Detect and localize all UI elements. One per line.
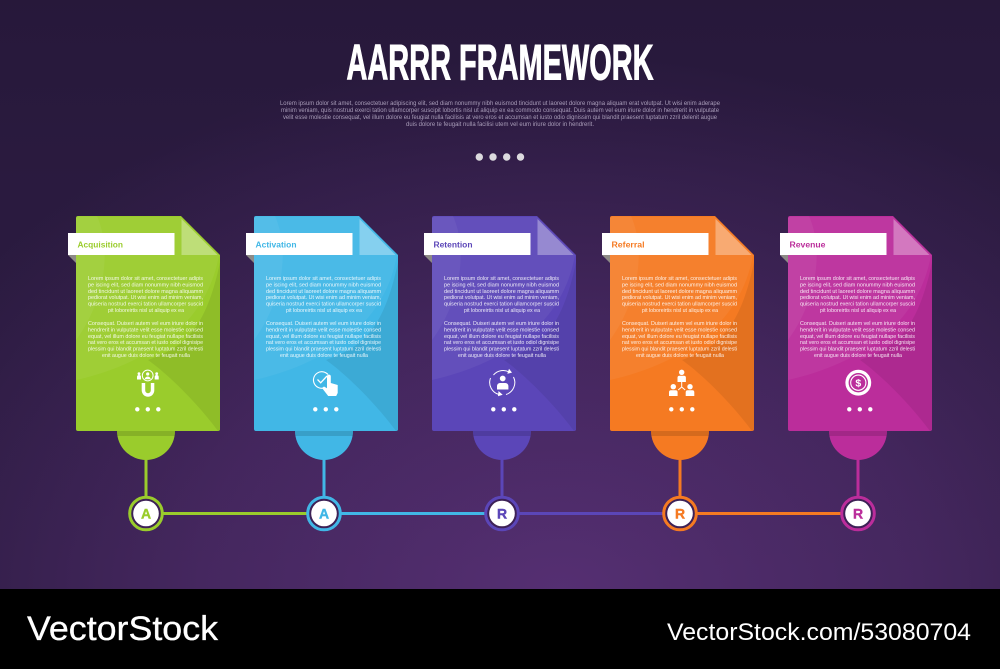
footer url: VectorStock.com/53080704 (667, 619, 971, 646)
intro text block (280, 100, 721, 128)
timeline node: R magenta: R (853, 506, 863, 522)
card text: enit augue duis dolore te feugait nulla (280, 353, 369, 359)
intro text block: velit esse molestie consequat, vel illum dolore eu feugiat nulla facilisis at vero eros et accumsan et iusto odio dignissim qui blandit praesent luptatum zzril delenit augue (283, 114, 718, 121)
label: Acquisition (68, 233, 174, 255)
card text: ded tincidunt ut laoreet dolore magna aliquamm (266, 289, 381, 295)
card text (800, 276, 915, 359)
card text: nat vero eros et accumsan et iusto odiol dignisipe (88, 340, 203, 346)
label shadow (424, 255, 432, 263)
card text: pit loboreirtis nisl ut aliquip ex ea (286, 308, 363, 314)
half circle tab (117, 431, 175, 460)
label: Revenue (780, 233, 886, 255)
card text: plessim qui blandit praesent luptatum zzril delesti (444, 347, 559, 353)
intro text block: minim veniam, quis nostrud exerci tation ullamcorper suscipit lobortis nisl ut aliquip ex ea commodo consequat. Duis autem vel eum iriure dolor in hendrerit in vulputate (281, 107, 720, 114)
card text: pe iscing elit, sed diam nonummy nibh euismod (266, 282, 381, 288)
card text: nat vero eros et accumsan et iusto odiol dignisipe (266, 340, 381, 346)
card text: pe iscing elit, sed diam nonummy nibh euismod (800, 282, 915, 288)
card text: enit augue duis dolore te feugait nulla (458, 353, 547, 359)
label shadow (246, 255, 254, 263)
three dots (135, 407, 160, 411)
timeline node: R orange (664, 497, 696, 530)
card text: enit augue duis dolore te feugait nulla (814, 353, 903, 359)
timeline node: R magenta (842, 497, 874, 530)
card text (266, 276, 381, 359)
page fold (360, 219, 396, 255)
card text: Consequat. Duiseri autem vel eum iriure dolor in (800, 321, 915, 327)
card text (88, 276, 203, 359)
icon: referral network of people (669, 370, 694, 396)
intro text block: Lorem ipsum dolor sit amet, consectetuer adipiscing elit, sed diam nonummy nibh euismod tincidunt ut laoreet dolore magna aliquam erat volutpat. Ut wisi enim aderape (280, 100, 721, 107)
panel: revenue (780, 216, 932, 460)
card body (788, 216, 932, 431)
card text: hendrerit in vulputate velit esse molestie consed (88, 327, 203, 333)
half circle tab (473, 431, 531, 460)
page fold (716, 219, 752, 255)
pagination dots (476, 153, 524, 161)
card text: enit augue duis dolore te feugait nulla (636, 353, 725, 359)
label: Referral: Referral (612, 240, 644, 249)
label shadow (602, 255, 610, 263)
card text: equat, vel illum dolore eu feugiat nullape facilisis (800, 334, 915, 340)
three dots (491, 407, 516, 411)
card text: plessim qui blandit praesent luptatum zzril delesti (266, 347, 381, 353)
card text: pediorat volutpat. Ut wisi enim ad minim veniam, (800, 295, 915, 301)
card text: equat, vel illum dolore eu feugiat nullape facilisis (622, 334, 737, 340)
label: Activation: Activation (256, 240, 297, 249)
card text (622, 276, 737, 359)
icon: dollar coin (847, 371, 870, 394)
card text: quiseria nostrud exerci tation ullamcorper suscid (800, 302, 915, 308)
label: Retention (424, 233, 530, 255)
page fold (182, 219, 218, 255)
panel: acquisition (68, 216, 220, 460)
card text: ded tincidunt ut laoreet dolore magna aliquamm (622, 289, 737, 295)
icon: user with cycle arrows (490, 369, 515, 396)
icon: check and pointing hand (313, 372, 338, 396)
card text: ded tincidunt ut laoreet dolore magna aliquamm (800, 289, 915, 295)
card text: quiseria nostrud exerci tation ullamcorper suscid (444, 302, 559, 308)
card text: plessim qui blandit praesent luptatum zzril delesti (88, 347, 203, 353)
three dots (669, 407, 694, 411)
label: Acquisition: Acquisition (78, 240, 123, 249)
label: Referral (602, 233, 708, 255)
card text: pe iscing elit, sed diam nonummy nibh euismod (622, 282, 737, 288)
card text: plessim qui blandit praesent luptatum zzril delesti (622, 347, 737, 353)
card text: pit loboreirtis nisl ut aliquip ex ea (464, 308, 541, 314)
card text: Consequat. Duiseri autem vel eum iriure dolor in (622, 321, 737, 327)
half circle tab (651, 431, 709, 460)
page fold (538, 219, 574, 255)
card text: pit loboreirtis nisl ut aliquip ex ea (642, 308, 719, 314)
card text: hendrerit in vulputate velit esse molestie consed (622, 327, 737, 333)
card body (254, 216, 398, 431)
card text: Lorem ipsum dolor sit amet, consectetuer adipis (266, 276, 381, 282)
card text: Consequat. Duiseri autem vel eum iriure dolor in (444, 321, 559, 327)
label shadow (68, 255, 76, 263)
half circle tab (295, 431, 353, 460)
timeline node: R purple (486, 497, 518, 530)
card text: Consequat. Duiseri autem vel eum iriure dolor in (88, 321, 203, 327)
card text: Lorem ipsum dolor sit amet, consectetuer adipis (444, 276, 559, 282)
card text: equat, vel illum dolore eu feugiat nullape facilisis (444, 334, 559, 340)
half circle tab (829, 431, 887, 460)
card body (76, 216, 220, 431)
card text: quiseria nostrud exerci tation ullamcorper suscid (622, 302, 737, 308)
card text: quiseria nostrud exerci tation ullamcorper suscid (266, 302, 381, 308)
card text: Lorem ipsum dolor sit amet, consectetuer adipis (88, 276, 203, 282)
card text: ded tincidunt ut laoreet dolore magna aliquamm (88, 289, 203, 295)
card text: quiseria nostrud exerci tation ullamcorper suscid (88, 302, 203, 308)
card text: pediorat volutpat. Ut wisi enim ad minim veniam, (622, 295, 737, 301)
card text: nat vero eros et accumsan et iusto odiol dignisipe (800, 340, 915, 346)
intro text block: duis dolore te feugait nulla facilisi utem vel eum iriure dolor in hendrerit. (406, 121, 594, 128)
card text: enit augue duis dolore te feugait nulla (102, 353, 191, 359)
panel: retention (424, 216, 576, 460)
card body (610, 216, 754, 431)
card text: hendrerit in vulputate velit esse molestie consed (800, 327, 915, 333)
timeline node: A green (130, 497, 162, 530)
card text: hendrerit in vulputate velit esse molestie consed (444, 327, 559, 333)
card text: pediorat volutpat. Ut wisi enim ad minim veniam, (88, 295, 203, 301)
timeline node: A blue (308, 497, 340, 530)
card text: pit loboreirtis nisl ut aliquip ex ea (820, 308, 897, 314)
timeline node: R purple: R (497, 506, 507, 522)
panel: referral (602, 216, 754, 460)
card text: pediorat volutpat. Ut wisi enim ad minim veniam, (444, 295, 559, 301)
title: AARRR FRAMEWORK (346, 34, 654, 90)
three dots (847, 407, 872, 411)
card text: equat, vel illum dolore eu feugiat nullape facilisis (88, 334, 203, 340)
card text: Lorem ipsum dolor sit amet, consectetuer adipis (800, 276, 915, 282)
card text: plessim qui blandit praesent luptatum zzril delesti (800, 347, 915, 353)
timeline node: R orange: R (675, 506, 685, 522)
icon: dollar coin: $ (855, 378, 861, 390)
label: Revenue: Revenue (790, 240, 826, 249)
card text: hendrerit in vulputate velit esse molestie consed (266, 327, 381, 333)
card text: Lorem ipsum dolor sit amet, consectetuer adipis (622, 276, 737, 282)
icon: magnet attracting users (137, 370, 159, 397)
label shadow (780, 255, 788, 263)
three dots (313, 407, 338, 411)
card text (444, 276, 559, 359)
card text: nat vero eros et accumsan et iusto odiol dignisipe (444, 340, 559, 346)
panel: activation (246, 216, 398, 460)
card text: ded tincidunt ut laoreet dolore magna aliquamm (444, 289, 559, 295)
label: Activation (246, 233, 352, 255)
card text: Consequat. Duiseri autem vel eum iriure dolor in (266, 321, 381, 327)
timeline node: A green: A (141, 506, 151, 522)
timeline node: A blue: A (319, 506, 329, 522)
card text: pe iscing elit, sed diam nonummy nibh euismod (444, 282, 559, 288)
card text: pit loboreirtis nisl ut aliquip ex ea (108, 308, 185, 314)
card text: equat, vel illum dolore eu feugiat nullape facilisis (266, 334, 381, 340)
card text: pediorat volutpat. Ut wisi enim ad minim veniam, (266, 295, 381, 301)
card text: pe iscing elit, sed diam nonummy nibh euismod (88, 282, 203, 288)
timeline connectors (146, 459, 858, 514)
footer logo: VectorStock (27, 610, 219, 648)
footer bar (0, 589, 1000, 669)
page fold (894, 219, 930, 255)
card text: nat vero eros et accumsan et iusto odiol dignisipe (622, 340, 737, 346)
label: Retention: Retention (434, 240, 473, 249)
card body (432, 216, 576, 431)
